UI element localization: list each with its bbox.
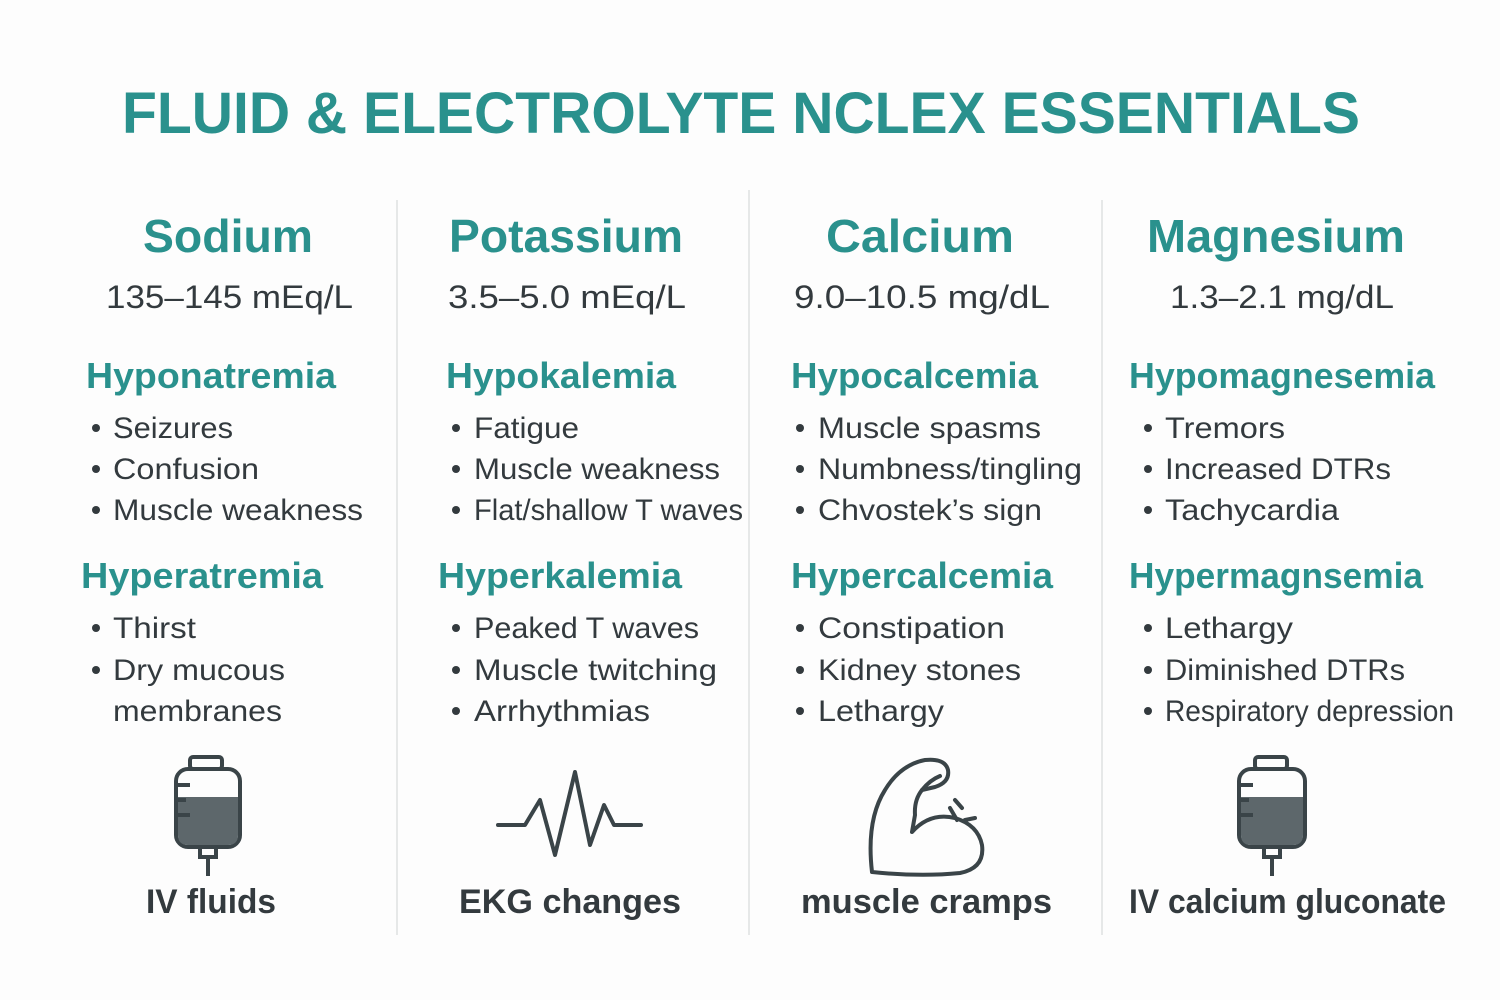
subhead: hypomagnesemia: Hypomagnesemia: [1129, 355, 1436, 396]
bullets: hyperkalemia: Muscle twitching: [474, 654, 717, 687]
label: muscle cramps: muscle cramps: [801, 883, 1052, 921]
subhead: hypermagnesemia: Hypermagnsemia: [1129, 555, 1424, 596]
bullets: hypermagnesemia: Lethargy: [1165, 612, 1293, 645]
bullets: hypokalemia: Muscle weakness: [474, 453, 720, 486]
range: potassium: 3.5–5.0 mEq/L: [448, 279, 686, 315]
subhead: hypocalcemia: Hypocalcemia: [791, 355, 1039, 396]
bullets: hyperkalemia: [452, 612, 717, 728]
panel: potassium: [438, 210, 743, 921]
heading: sodium: Sodium: [143, 210, 313, 262]
bullets: hypercalcemia: Kidney stones: [818, 654, 1021, 687]
heading: potassium: Potassium: [449, 210, 683, 262]
bullets: hypermagnesemia: [1144, 612, 1454, 728]
bullets: hypernatremia: membranes: [113, 695, 282, 728]
bullets: hypomagnesemia: Tremors: [1165, 412, 1285, 445]
subhead: hypokalemia: Hypokalemia: [446, 355, 677, 396]
bullets: hypermagnesemia: Diminished DTRs: [1165, 654, 1405, 687]
bullets: hypocalcemia: Muscle spasms: [818, 412, 1041, 445]
subhead: hyponatremia: Hyponatremia: [86, 355, 337, 396]
icon: flexed arm: [871, 760, 982, 875]
bullets: hypernatremia: [92, 612, 285, 728]
subhead: hypercalcemia: Hypercalcemia: [791, 555, 1054, 596]
panel: calcium: [791, 210, 1082, 921]
bullets: hyponatremia: Muscle weakness: [113, 494, 363, 527]
label: EKG changes: EKG changes: [459, 883, 681, 921]
bullets: hypernatremia: Dry mucous: [113, 654, 285, 687]
range: calcium: 9.0–10.5 mg/dL: [794, 279, 1050, 315]
subhead: hyperkalemia: Hyperkalemia: [438, 555, 683, 596]
bullets: hypercalcemia: Lethargy: [818, 695, 944, 728]
title: FLUID & ELECTROLYTE NCLEX ESSENTIALS: [122, 81, 1360, 146]
bullets: hyperkalemia: Arrhythmias: [474, 695, 650, 728]
bullets: hyponatremia: [92, 412, 363, 527]
bullets: hypokalemia: [452, 412, 743, 527]
range: magnesium: 1.3–2.1 mg/dL: [1170, 279, 1394, 315]
heading: calcium: Calcium: [826, 210, 1014, 262]
bullets: hyperkalemia: Peaked T waves: [474, 612, 699, 645]
bullets: hypocalcemia: Chvostek’s sign: [818, 494, 1042, 527]
bullets: hyponatremia: Seizures: [113, 412, 233, 445]
icon: EKG: [498, 772, 641, 855]
panel: sodium: [81, 210, 363, 921]
bullets: hyponatremia: Confusion: [113, 453, 259, 486]
panel: magnesium: [1129, 210, 1454, 921]
bullets: hypermagnesemia: Respiratory depression: [1165, 695, 1454, 728]
bullets: hypomagnesemia: Tachycardia: [1165, 494, 1339, 527]
bullets: hypokalemia: Flat/shallow T waves: [474, 494, 743, 527]
label: IV fluids: IV fluids: [146, 883, 276, 921]
label: IV calcium gluconate: IV calcium gluconate: [1129, 883, 1446, 921]
bullets: hypercalcemia: [796, 612, 1021, 728]
icon: IV bag: [176, 757, 240, 876]
range: sodium: 135–145 mEq/L: [106, 279, 353, 315]
bullets: hypercalcemia: Constipation: [818, 612, 1005, 645]
bullets: hypernatremia: Thirst: [113, 612, 197, 645]
bullets: hypocalcemia: Numbness/tingling: [818, 453, 1082, 486]
icon: IV bag: [1239, 757, 1305, 876]
bullets: hypomagnesemia: [1144, 412, 1391, 527]
bullets: hypokalemia: Fatigue: [474, 412, 579, 445]
bullets: hypocalcemia: [796, 412, 1082, 527]
subhead: hypernatremia: Hyperatremia: [81, 555, 324, 596]
bullets: hypomagnesemia: Increased DTRs: [1165, 453, 1391, 486]
heading: magnesium: Magnesium: [1147, 210, 1405, 262]
